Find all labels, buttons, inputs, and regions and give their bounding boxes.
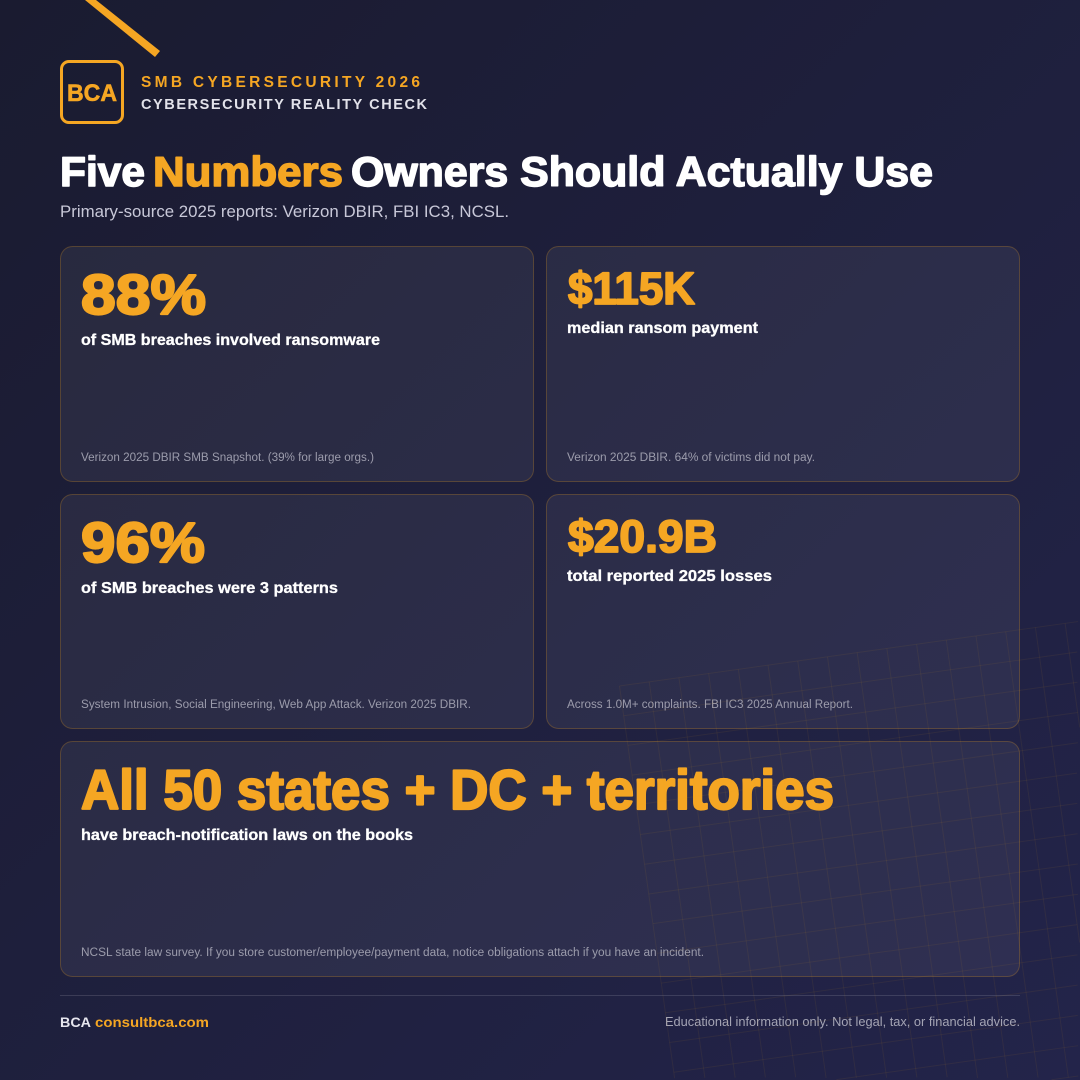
logo badge: BCA <box>67 80 117 107</box>
accent diagonal stroke <box>85 0 160 57</box>
panel: 88% ransomware <box>60 246 534 482</box>
label: have breach-notification laws on the books <box>81 827 413 844</box>
source: Verizon 2025 DBIR SMB Snapshot. (39% for large orgs.) <box>81 452 374 464</box>
website: consultbca.com <box>95 1014 209 1030</box>
source: Verizon 2025 DBIR. 64% of victims did not pay. <box>567 452 815 464</box>
label: median ransom payment <box>567 320 759 337</box>
label: of SMB breaches were 3 patterns <box>81 580 338 597</box>
label: of SMB breaches involved ransomware <box>81 332 380 349</box>
title <box>60 148 933 195</box>
source: System Intrusion, Social Engineering, Web App Attack. Verizon 2025 DBIR. <box>81 699 471 711</box>
title: Owners Should Actually Use <box>351 148 933 195</box>
subtitle: Primary-source 2025 reports: Verizon DBIR, FBI IC3, NCSL. <box>60 203 509 221</box>
eyebrow: SMB CYBERSECURITY 2026 <box>141 74 420 91</box>
panel: breach-notification laws <box>60 742 1020 976</box>
header <box>62 62 428 122</box>
footer <box>60 996 1020 1030</box>
source: Across 1.0M+ complaints. FBI IC3 2025 Annual Report. <box>567 699 853 711</box>
stat: 96%: 96% <box>81 511 205 575</box>
logo badge <box>62 62 122 122</box>
panel: $115K median ransom <box>546 246 1020 482</box>
title: Five <box>60 148 145 195</box>
source: NCSL state law survey. If you store customer/employee/payment data, notice obligations attach if you have an incident. <box>81 947 704 959</box>
label: total reported 2025 losses <box>567 568 772 585</box>
stat: all 50 states: All 50 states + DC + territories <box>81 758 834 821</box>
stat: $20.9B: $20.9B <box>568 511 717 562</box>
header subtitle: CYBERSECURITY REALITY CHECK <box>141 97 428 113</box>
stat: $115K: $115K <box>568 263 695 314</box>
title: Numbers <box>153 148 343 195</box>
disclaimer: Educational information only. Not legal, tax, or financial advice. <box>665 1015 1020 1029</box>
panel: 96% three patterns <box>60 494 534 728</box>
stat: 88%: 88% <box>81 263 206 327</box>
brand: BCA <box>60 1014 91 1030</box>
panel: $20.9B losses <box>546 494 1020 728</box>
